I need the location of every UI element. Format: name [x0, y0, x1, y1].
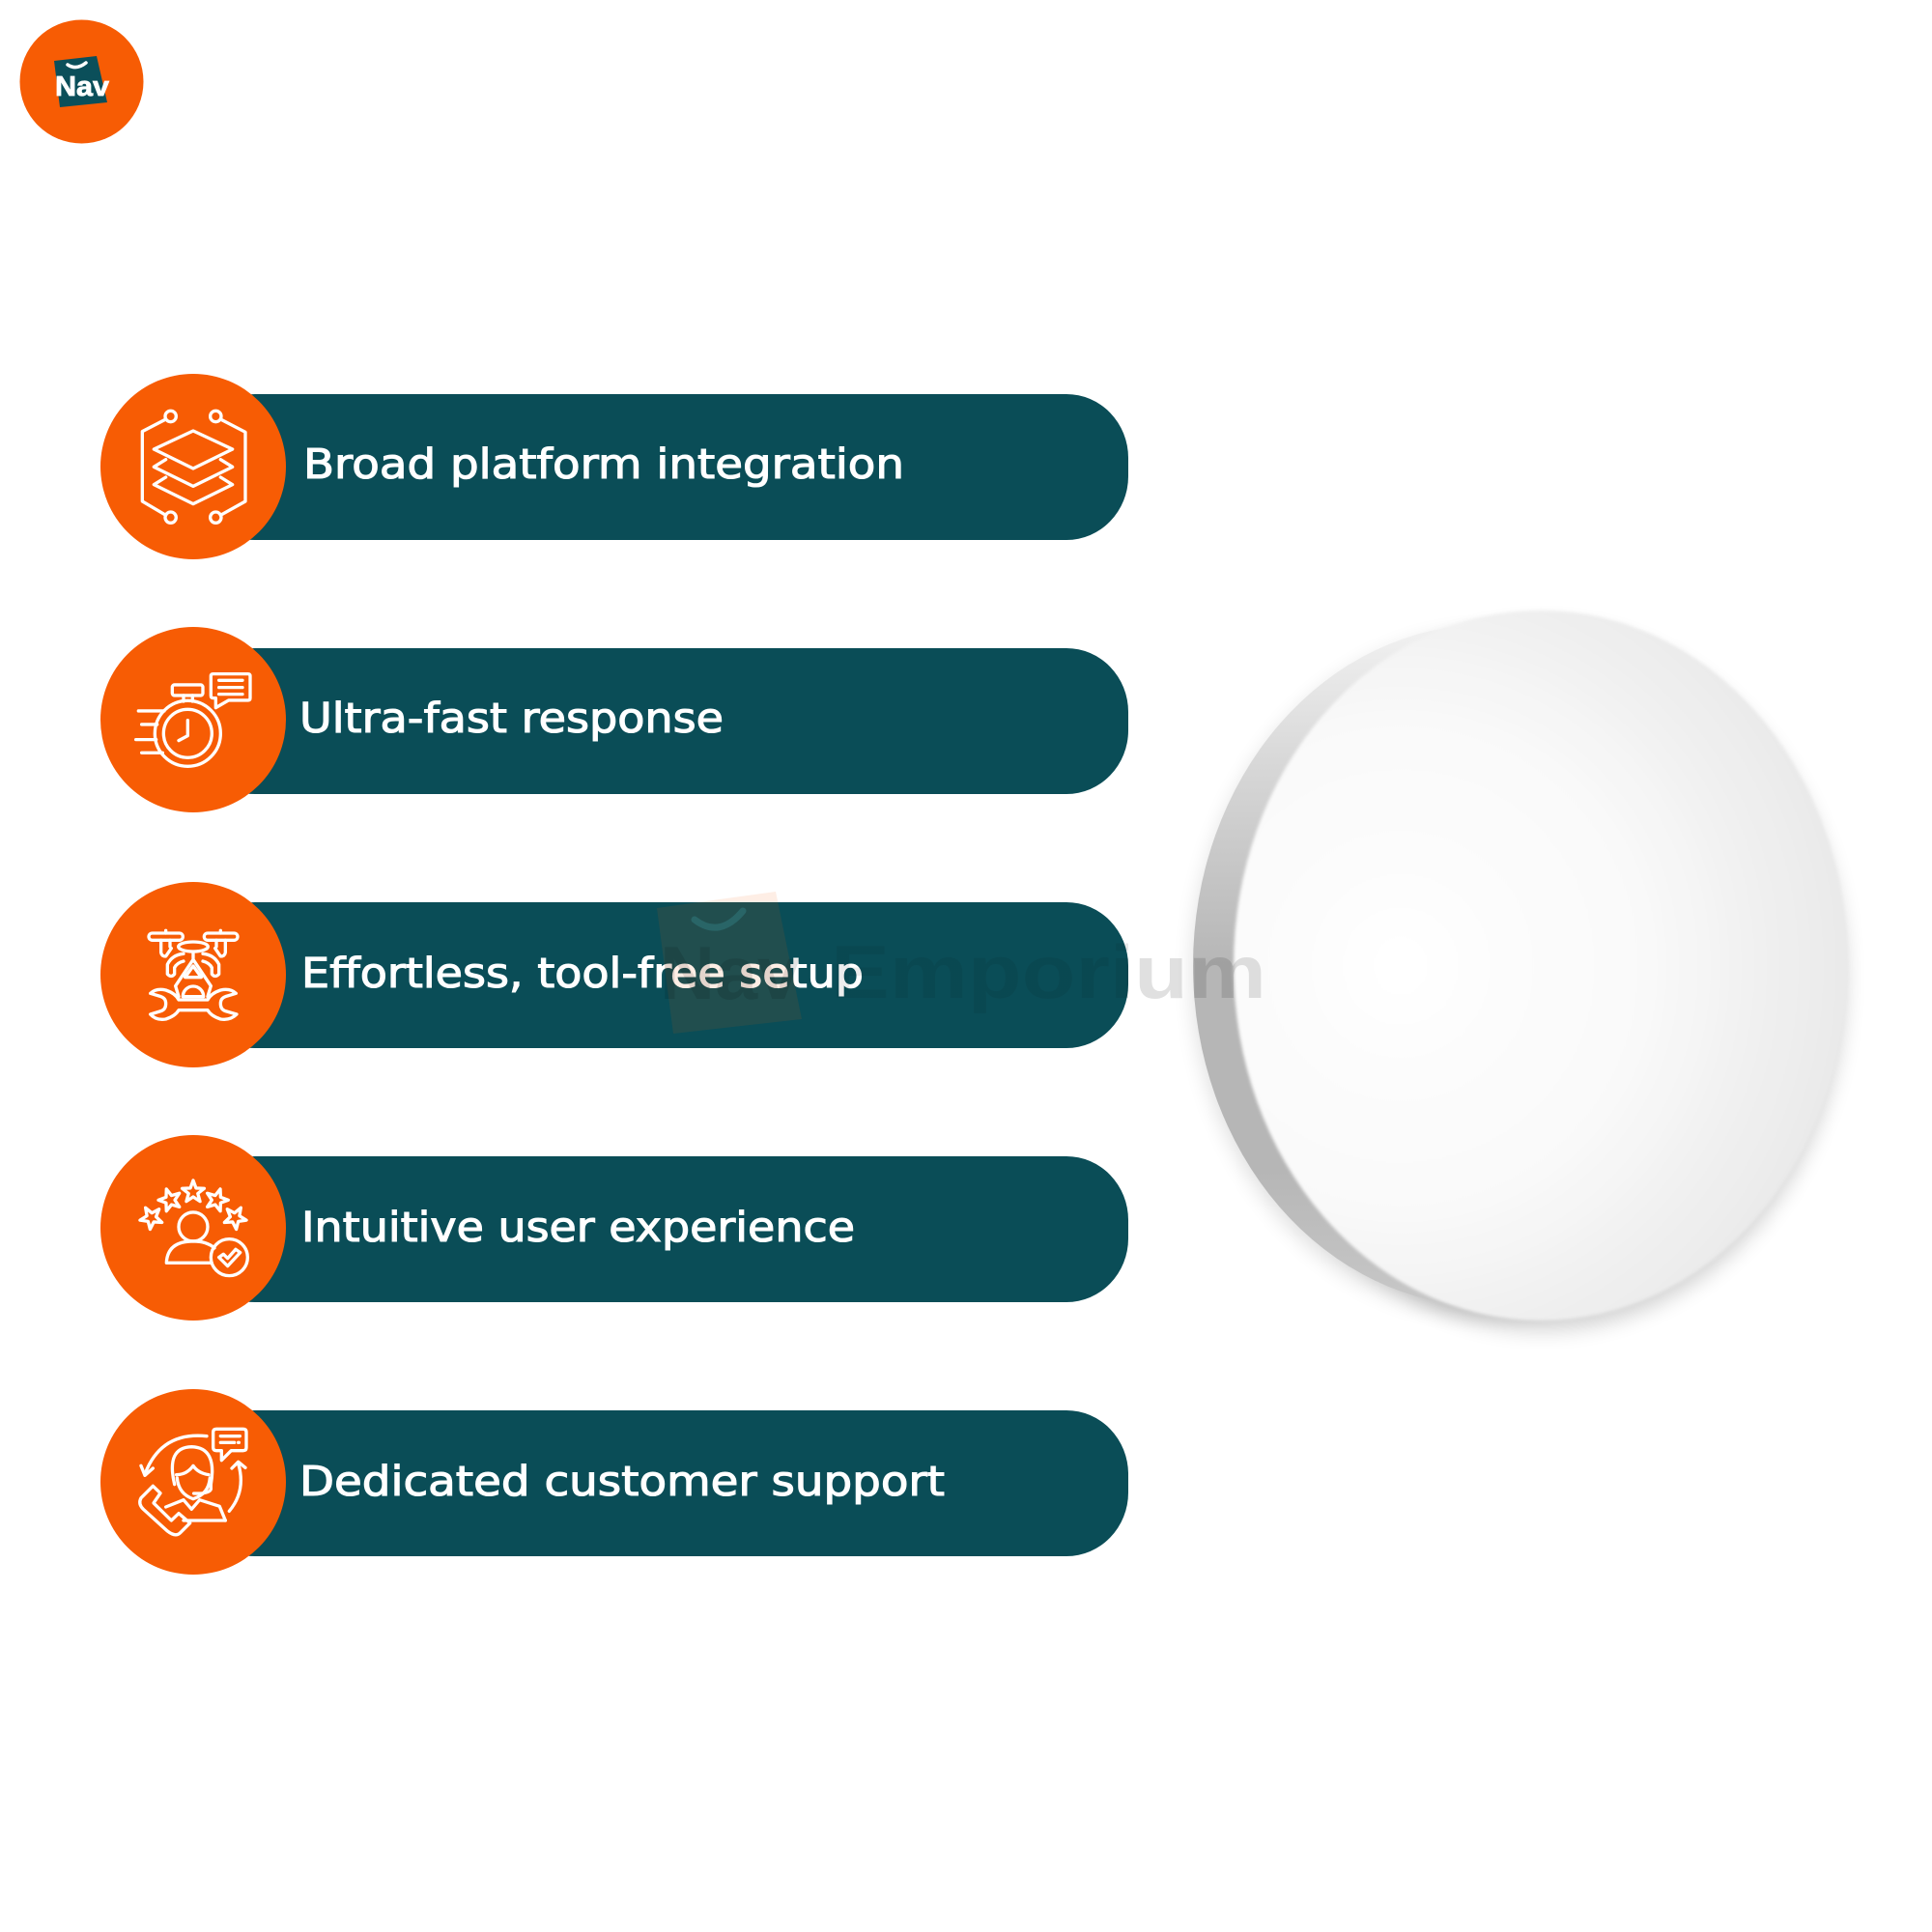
icon: layered platforms [142, 411, 245, 523]
label: Ultra-fast response [299, 696, 724, 743]
icon: stopwatch with speech bubble [136, 674, 250, 766]
label: Intuitive user experience [301, 1205, 855, 1252]
label: Dedicated customer support [299, 1459, 945, 1506]
row 5: Dedicated customer support [100, 1389, 1128, 1575]
label: Broad platform integration [303, 441, 904, 489]
row 1: Broad platform integration [100, 374, 1128, 559]
logo badge [19, 19, 143, 143]
row 3: Effortless, tool-free setup [100, 882, 1128, 1067]
watermark: Nav Emporium [657, 892, 1266, 1034]
icon: rated user with five stars [136, 1180, 250, 1276]
row 4: Intuitive user experience [100, 1135, 1128, 1321]
row 2: Ultra-fast response [100, 627, 1128, 812]
label: Effortless, tool-free setup [301, 951, 864, 998]
icon: drone and wrench [149, 930, 238, 1019]
icon: customer support agent [140, 1429, 246, 1535]
watermark: Nav Emporium: Nav [660, 930, 801, 1015]
product photo: round white wall device [1193, 611, 1848, 1330]
logo badge: Nav [55, 71, 109, 102]
watermark: Nav Emporium: Emporium [831, 929, 1266, 1014]
